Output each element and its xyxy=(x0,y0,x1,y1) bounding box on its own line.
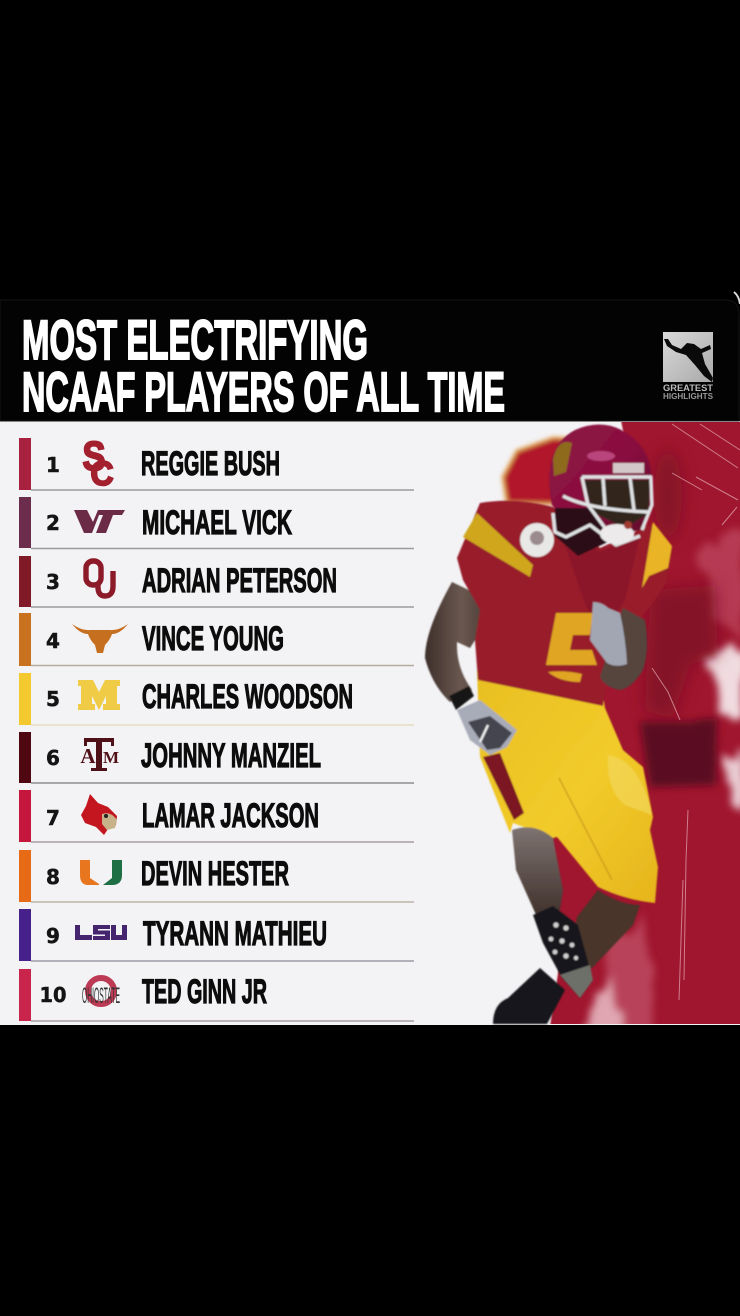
row 4: VINCE YOUNG xyxy=(142,620,284,658)
infographic canvas xyxy=(0,291,740,1025)
right glove xyxy=(590,602,627,666)
player illustration xyxy=(425,425,672,1024)
forearm xyxy=(600,608,647,690)
helmet shine xyxy=(587,451,615,461)
row 7 xyxy=(19,790,414,842)
row 4: 4 xyxy=(46,629,60,653)
icon: Texas A&M logo: M xyxy=(103,748,119,767)
row 3: 3 xyxy=(46,570,60,594)
left arm xyxy=(425,582,498,702)
left glove xyxy=(457,700,517,755)
icon: LSU logo xyxy=(75,925,127,940)
row 2 xyxy=(19,497,414,548)
red painted field xyxy=(540,415,740,1040)
logo: Greatest Highlights: HIGHLIGHTS xyxy=(663,392,714,401)
jersey shading xyxy=(560,530,640,640)
row 1: 1 xyxy=(46,453,60,477)
pants xyxy=(477,670,658,903)
pants highlight xyxy=(608,755,652,815)
row 8: DEVIN HESTER xyxy=(141,855,289,893)
pink mottled streaks xyxy=(582,525,740,1040)
shadow on backdrop xyxy=(645,450,718,720)
icon: Michigan logo xyxy=(78,680,120,710)
face xyxy=(584,480,650,528)
jersey number 5 xyxy=(546,613,597,665)
light panel background xyxy=(0,421,740,1025)
row 5 xyxy=(19,673,414,725)
icon: Ohio State logo xyxy=(82,978,120,1008)
icon: USC logo: S xyxy=(82,433,106,479)
row 6: JOHNNY MANZIEL xyxy=(141,737,321,775)
logo wordmark: GREATEST xyxy=(663,383,714,393)
row 2: MICHAEL VICK xyxy=(142,504,292,542)
row 1 xyxy=(19,433,414,493)
facemask xyxy=(553,477,652,545)
icon: Texas A&M logo: A xyxy=(80,744,96,768)
chin strap xyxy=(600,524,634,544)
header bar xyxy=(0,300,739,421)
back foot xyxy=(493,968,565,1024)
row 9: 9 xyxy=(46,924,60,948)
octagon emblem behind helmet xyxy=(498,433,568,508)
pants stripe xyxy=(483,753,524,820)
commemorative patch xyxy=(520,523,554,557)
scratch lines xyxy=(652,424,740,1000)
icon: Texas longhorn logo xyxy=(72,624,128,653)
row 7: 7 xyxy=(46,806,60,830)
row 4 xyxy=(19,613,414,666)
row 6: 6 xyxy=(46,746,60,770)
icon: Louisville cardinal logo xyxy=(81,794,117,835)
row 3: ADRIAN PETERSON xyxy=(142,562,337,600)
helmet xyxy=(549,425,652,556)
row 10 xyxy=(19,969,414,1021)
left shoulder stripe xyxy=(463,513,533,577)
icon: Oklahoma logo xyxy=(86,561,113,596)
row 1: REGGIE BUSH xyxy=(141,445,280,483)
cleat studs xyxy=(549,922,578,960)
helmet nameplate xyxy=(613,463,644,473)
ranked list xyxy=(19,433,414,1021)
row 10: 10 xyxy=(40,983,66,1007)
row 3 xyxy=(19,556,414,607)
red textured backdrop xyxy=(503,415,740,1040)
logo square xyxy=(663,332,713,382)
pants seam xyxy=(559,778,612,880)
title xyxy=(22,308,505,423)
helmet logo xyxy=(553,442,572,476)
row 7: LAMAR JACKSON xyxy=(142,797,319,835)
corner mark xyxy=(734,292,740,304)
jersey xyxy=(457,501,672,706)
player shadow shape xyxy=(640,718,717,787)
row 10: TED GINN JR xyxy=(142,973,267,1011)
front leg xyxy=(512,827,563,917)
diving player silhouette xyxy=(664,339,713,382)
logo: Greatest Highlights xyxy=(663,332,714,401)
row 5: CHARLES WOODSON xyxy=(142,678,353,716)
right shoulder stripe xyxy=(642,522,672,588)
neck shadow xyxy=(555,508,612,556)
back leg xyxy=(570,890,640,968)
title: MOST ELECTRIFYING xyxy=(22,308,368,371)
row 8: 8 xyxy=(46,865,60,889)
row 8 xyxy=(19,850,414,902)
row 9: TYRANN MATHIEU xyxy=(143,915,327,953)
icon: USC logo: C xyxy=(90,455,114,493)
wristband xyxy=(449,686,474,710)
icon: USC logo xyxy=(82,433,114,493)
jersey hem mark xyxy=(548,671,582,682)
row 9 xyxy=(19,909,414,961)
icon: Texas A&M logo xyxy=(80,738,119,771)
row 10: OHIOSTATE xyxy=(82,983,120,1008)
icon: Miami U logo xyxy=(80,860,122,885)
row 5: 5 xyxy=(46,687,60,711)
row 2: 2 xyxy=(46,511,60,535)
cleat xyxy=(533,906,593,998)
icon: Virginia Tech logo xyxy=(74,510,125,533)
row 6 xyxy=(19,732,414,783)
